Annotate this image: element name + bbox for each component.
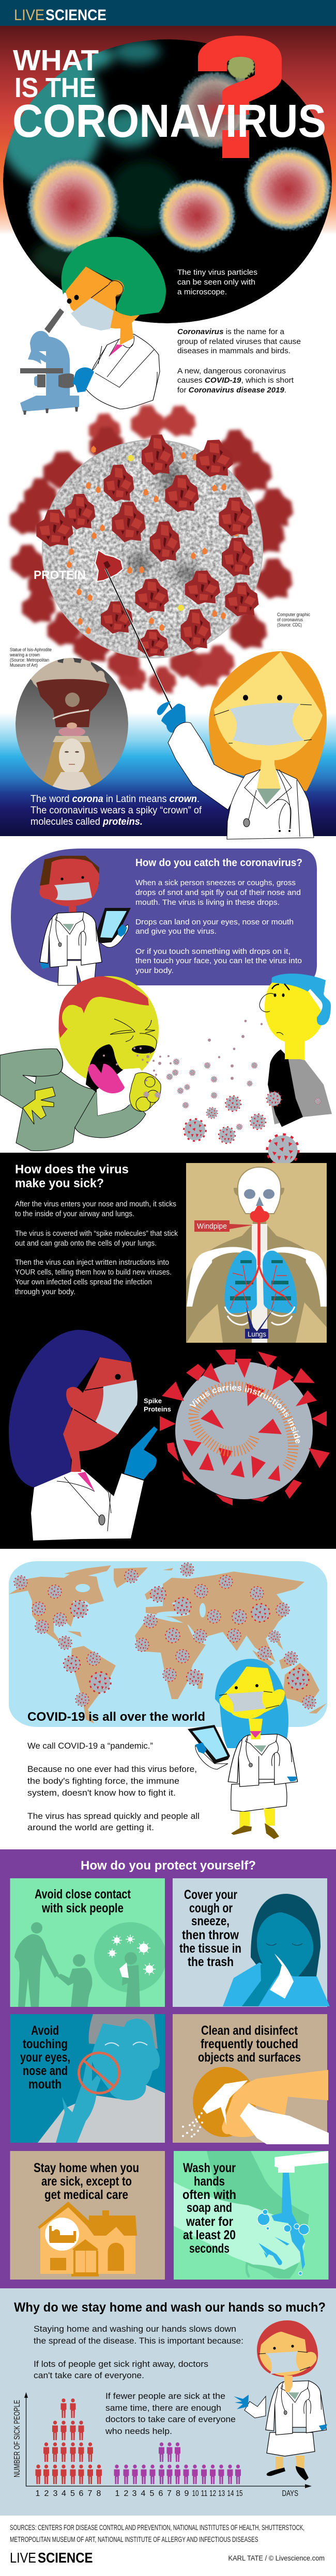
worried person (259, 973, 332, 1127)
card: wash your hands: often with (182, 2188, 236, 2202)
card: cover your cough: the trash (188, 1955, 234, 1969)
text: why it matters: Staying home and washing our hands slows down (34, 2324, 236, 2334)
text: how the virus works: Your own infected cells spread the infection (15, 1278, 152, 1286)
large virus diagram: Virus carries instructions inside (189, 1384, 300, 1443)
chart: epidemic curves: 1 (115, 2489, 120, 2498)
text: catching description: drops of snot and spit fly out of their nose and (135, 889, 301, 897)
card: cover your cough: then throw (182, 1928, 239, 1942)
panel: world map (9, 1561, 327, 1727)
icon: microscope (20, 308, 79, 415)
pointer stick (105, 569, 174, 714)
heading: how does the virus make you sick (15, 1163, 129, 1190)
text: how the virus works: to the inside of your airway and lungs. (15, 1210, 134, 1218)
text: pandemic explanation (27, 1741, 200, 1832)
scientist looking into microscope (62, 237, 166, 409)
text: what coronavirus is: Coronavirus is the name for a (177, 328, 285, 336)
text: tiny virus particles: The tiny virus particles (177, 269, 257, 277)
text: catching description: and give you the virus. (135, 928, 217, 936)
text: why it matters: can't take care of everyone. (34, 2370, 144, 2380)
chart: epidemic curves: 2 (124, 2489, 129, 2498)
label: windpipe (194, 1220, 253, 1232)
text: corona means crown: The word corona in Latin means crown. (30, 793, 200, 805)
text: how the virus works: After the virus enters your nose and mouth, it sticks (15, 1200, 176, 1208)
text: what coronavirus is: group of related viruses that cause (177, 338, 301, 346)
text: how the virus works: out and can grab onto the cells of your lungs. (15, 1239, 157, 1248)
card: wash your hands: seconds (189, 2241, 230, 2256)
caption: statue: Statue of Isis-Aphrodite (10, 647, 52, 652)
panel: how do you protect yourself (0, 1849, 336, 2288)
card: stay home (10, 2151, 165, 2280)
text: catching description: your body. (135, 967, 174, 975)
card: cover your cough: sneeze, (191, 1914, 230, 1928)
text: fewer people sick (105, 2391, 236, 2436)
text: what coronavirus is: A new, dangerous coronavirus (177, 367, 286, 375)
chart: epidemic curves: 7 (167, 2489, 172, 2498)
logo: science word: SCIENCE (45, 7, 106, 24)
card: cover your cough: Cover your (184, 1888, 237, 1902)
text: catching description (135, 879, 302, 975)
card: avoid close contact: Avoid close contact (35, 1887, 131, 1902)
microscope image of virus particles (0, 39, 332, 323)
chart: epidemic curves: 4 (141, 2489, 146, 2498)
title: WHAT (13, 44, 99, 77)
chart: epidemic curves: 2 (44, 2489, 49, 2498)
caption: computer graphic (277, 612, 310, 627)
label: spike proteins: Proteins (144, 1405, 171, 1413)
caption: computer graphic: (Source: CDC) (277, 622, 302, 627)
sneezing person (0, 976, 161, 1151)
card: wash your hands: hands (194, 2174, 225, 2189)
large virus crossing into black panel (267, 1135, 298, 1166)
hero gradient background (0, 26, 336, 235)
text: catching description: When a sick person sneezes or coughs, gross (135, 879, 296, 887)
card: wash your hands: Wash your (183, 2161, 236, 2175)
caption: computer graphic: of coronavirus (277, 617, 303, 622)
doctor waving (234, 2320, 327, 2480)
chart: epidemic curves: 6 (159, 2489, 163, 2498)
chart: epidemic curves (13, 2392, 312, 2498)
chart: epidemic curves: 3 (53, 2489, 58, 2498)
text: catching description: Drops can land on your eyes, nose or mouth (135, 918, 294, 926)
footer logo (10, 2550, 93, 2566)
text: corona means crown: The coronavirus wears a spiky “crown” of (30, 805, 202, 816)
label: lungs (245, 1307, 275, 1339)
chart: epidemic curves: 12 (209, 2489, 216, 2498)
card: clean and disinfect: frequently touched (201, 2037, 298, 2051)
text: fewer people sick: If fewer people are sick at the (105, 2391, 225, 2401)
caption: statue: (Source: Metropolitan (10, 657, 49, 663)
text: catching description: then touch your face, you can let the virus into (135, 957, 302, 965)
chart: epidemic curves: 1 (36, 2489, 40, 2498)
heading: COVID-19 is all over the world: COVID-19 is all over the world (27, 1710, 205, 1724)
virus droplets flying from sneeze (103, 1020, 321, 1143)
text: how the virus works: YOUR cells, telling them how to build new viruses. (15, 1268, 172, 1277)
chart: epidemic curves: NUMBER OF SICK PEOPLE (13, 2400, 22, 2477)
doctor with tablet (39, 856, 131, 985)
card: cover your cough: cough or (189, 1901, 233, 1915)
text: tiny virus particles (177, 269, 257, 296)
footer logo: SCIENCE (38, 2550, 93, 2566)
panel: respiratory system anatomy (186, 1163, 327, 1343)
chart: epidemic curves: 10 (192, 2489, 199, 2498)
photo: statue with crown (16, 655, 128, 793)
chart: epidemic curves: 5 (150, 2489, 155, 2498)
label: spike proteins: Spike (144, 1397, 162, 1405)
card: cover your cough (173, 1878, 330, 2007)
text: why it matters: If lots of people get sick right away, doctors (34, 2359, 208, 2369)
caption: statue (9, 647, 52, 668)
text: pandemic explanation: around the world are getting it. (27, 1823, 154, 1832)
highlighted protein spike (95, 550, 123, 582)
text: corona means crown: molecules called proteins. (30, 816, 143, 827)
card: avoid touching your face: touching (23, 2037, 68, 2051)
doctor pointing at spike proteins (9, 1330, 158, 1541)
heading: how do you catch: How do you catch the coronavirus? (135, 857, 302, 869)
text: what coronavirus is: for Coronavirus disease 2019 . (177, 386, 286, 395)
text: pandemic explanation: system, doesn't know how to fight it. (27, 1788, 176, 1798)
text: pandemic explanation: The virus has spread quickly and people all (27, 1811, 200, 1821)
text: how the virus works: through your body. (15, 1288, 75, 1296)
text: pandemic explanation: Because no one ever had this virus before, (27, 1764, 197, 1774)
caption: computer graphic: Computer graphic (277, 612, 310, 617)
text: how the virus works: The virus is covered with “spike molecules” that stick (15, 1230, 178, 1238)
panel: how does the virus make you sick (0, 1153, 336, 1549)
card: avoid close contact (10, 1878, 166, 2008)
card: clean and disinfect: objects and surfaces (198, 2050, 301, 2065)
card: wash your hands (174, 2151, 329, 2280)
chart: epidemic curves: 6 (79, 2489, 84, 2498)
text: fewer people sick: same time, there are enough (105, 2403, 221, 2413)
text: tiny virus particles: can be seen only with (177, 278, 255, 287)
blue gradient background (0, 713, 336, 836)
label: windpipe: Windpipe (197, 1222, 227, 1231)
text: what coronavirus is: diseases in mammals and birds. (177, 347, 291, 355)
text: catching description: mouth. The virus is living in these drops. (135, 899, 280, 907)
chart: epidemic curves: DAYS (282, 2489, 298, 2498)
footer logo: LIVE (10, 2550, 36, 2566)
heading: protect yourself: How do you protect yourself? (81, 1859, 256, 1873)
card: avoid touching your face: nose and (23, 2064, 68, 2078)
logo: LiveScience: LIVE (14, 7, 44, 24)
card: cover your cough: the tissue in (179, 1941, 241, 1956)
card: wash your hands: soap and (187, 2201, 232, 2215)
virus markers on map (14, 1563, 316, 1709)
text: pandemic explanation: the body's fighting force, the immune (27, 1776, 179, 1786)
card: avoid touching your face (10, 2014, 165, 2143)
card: avoid touching your face: your eyes, (20, 2050, 70, 2065)
doctor with tablet by map (188, 1659, 298, 1839)
chart: epidemic curves: 3 (132, 2489, 137, 2498)
chart: epidemic curves: 14 (227, 2489, 234, 2498)
chart: epidemic curves: 4 (62, 2489, 66, 2498)
header bar (0, 0, 336, 26)
chart: epidemic curves: 11 (201, 2489, 208, 2498)
text: why it matters: the spread of the disease. This is important because: (34, 2336, 243, 2346)
credit: KARL TATE / © Livescience.com (228, 2554, 325, 2562)
heading: how does the virus make you sick: make you sick? (15, 1176, 104, 1190)
chart: epidemic curves: 7 (88, 2489, 93, 2498)
text: corona means crown (30, 793, 202, 827)
title: IS THE (14, 72, 96, 103)
large virus diagram (160, 1349, 330, 1505)
text: pandemic explanation: We call COVID-19 a “pandemic.” (27, 1741, 153, 1751)
label: spike proteins (144, 1397, 171, 1413)
heading: why stay home: Why do we stay home and wash our hands so much? (14, 2300, 326, 2315)
chart: epidemic curves: 13 (218, 2489, 225, 2498)
label: protein: PROTEIN (34, 568, 86, 582)
label: lungs: Lungs (248, 1330, 266, 1338)
text: tiny virus particles: a microscope. (177, 288, 227, 296)
card: stay home: get medical care (44, 2188, 128, 2202)
text: catching description: Or if you touch something with drops on it, (135, 948, 291, 956)
card: wash your hands: water for (186, 2214, 233, 2229)
card: stay home: Stay home when you (34, 2161, 139, 2175)
chart: epidemic curves: 9 (185, 2489, 189, 2498)
card: clean and disinfect (173, 2014, 329, 2144)
card: clean and disinfect: Clean and disinfect (201, 2023, 298, 2038)
chart: epidemic curves: 8 (97, 2489, 101, 2498)
panel: how do you catch the coronavirus (11, 849, 317, 985)
title (12, 44, 326, 147)
text: fewer people sick: who needs help. (105, 2426, 172, 2436)
card: avoid touching your face: Avoid (31, 2023, 59, 2038)
chart: epidemic curves: 8 (176, 2489, 180, 2498)
text: why it matters (34, 2324, 243, 2380)
text: how the virus works: Then the virus can inject written instructions into (15, 1259, 169, 1267)
3D coronavirus graphic (10, 405, 293, 694)
question mark (198, 36, 282, 158)
sources (10, 2523, 304, 2544)
card: avoid touching your face: mouth (28, 2077, 62, 2092)
text: fewer people sick: doctors to take care of everyone (105, 2414, 236, 2424)
panel: why do we stay home (0, 2288, 336, 2516)
caption: statue: Museum of Art) (10, 663, 38, 668)
doctor pointing at virus (157, 651, 327, 839)
text: what coronavirus is: causes COVID-19 , which is short (177, 376, 294, 385)
chart: epidemic curves: 15 (236, 2489, 243, 2498)
card: stay home: are sick, except to (41, 2174, 132, 2189)
heading: how does the virus make you sick: How does the virus (15, 1163, 129, 1176)
chart: epidemic curves: 5 (70, 2489, 75, 2498)
caption: statue: wearing a crown (9, 652, 40, 657)
card: wash your hands: at least 20 (183, 2228, 236, 2242)
text: what coronavirus is (177, 328, 301, 395)
card: avoid close contact: with sick people (41, 1901, 124, 1915)
text: how the virus works (15, 1200, 178, 1296)
